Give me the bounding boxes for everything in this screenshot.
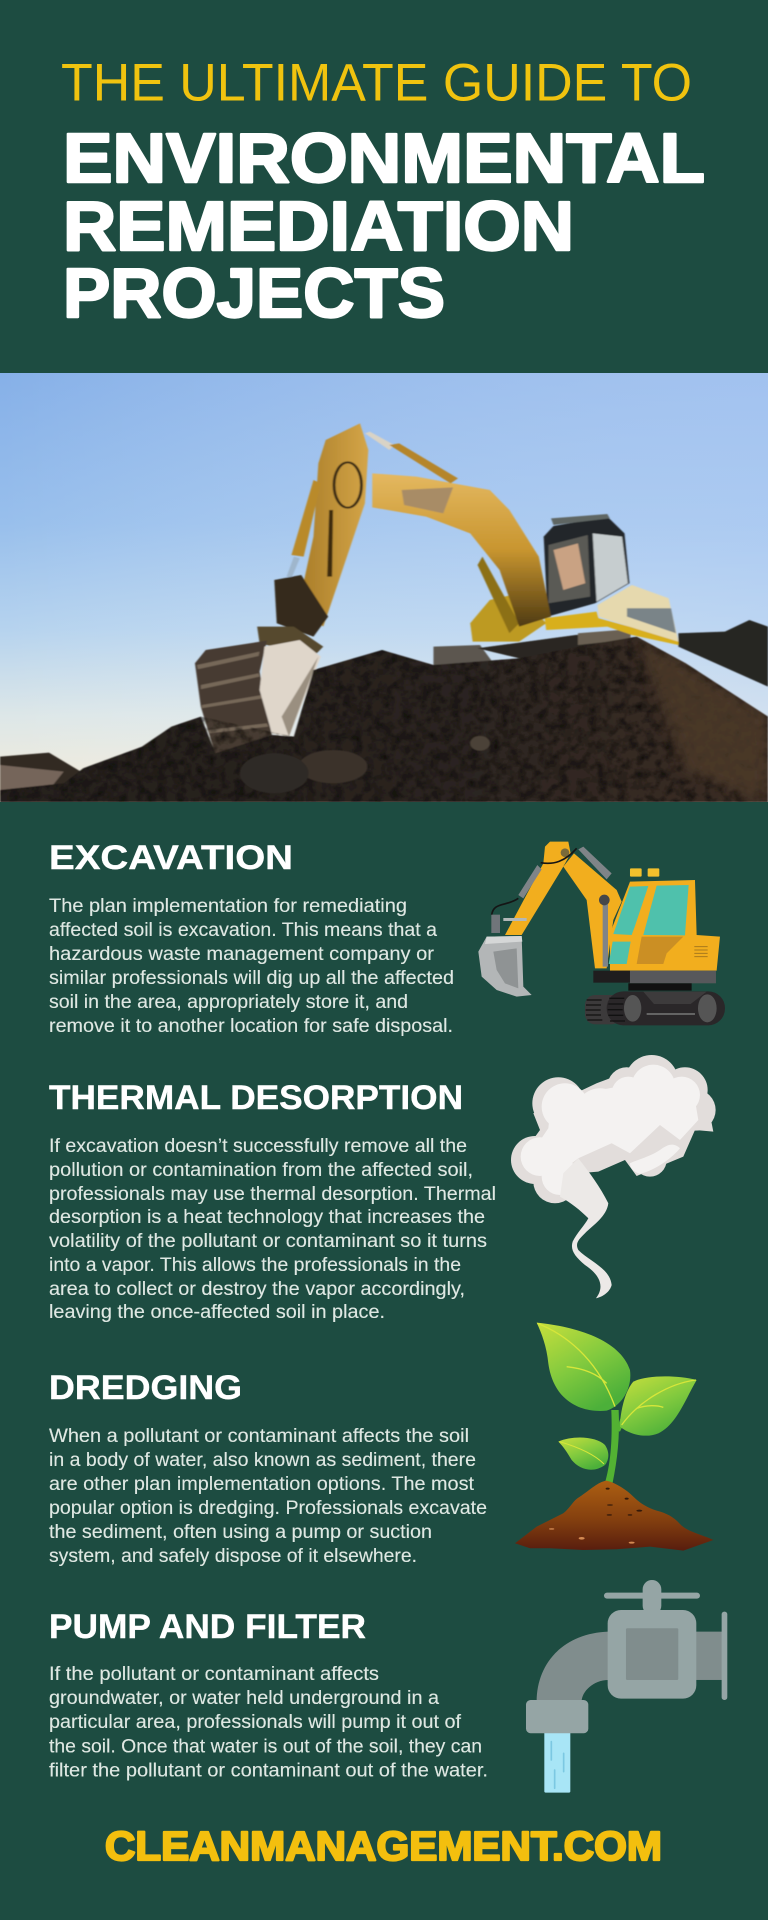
body: excavation: hazardous waste management company or bbox=[49, 944, 435, 965]
title line 2: REMEDIATION bbox=[63, 187, 574, 265]
body: dredging: are other plan implementation options. The most bbox=[49, 1474, 475, 1495]
body: excavation bbox=[49, 896, 454, 1037]
footer website: CLEANMANAGEMENT.COM bbox=[105, 1823, 662, 1869]
hero photo: excavator on soil mound bbox=[0, 373, 768, 803]
body: dredging: When a pollutant or contaminant affects the soil bbox=[49, 1426, 469, 1447]
icon: smoke cloud bbox=[511, 1055, 716, 1298]
heading: thermal desorption: THERMAL DESORPTION bbox=[49, 1079, 463, 1117]
body: thermal desorption: If excavation doesn’t successfully remove all the bbox=[49, 1136, 467, 1157]
section: dredging bbox=[49, 1323, 713, 1567]
body: excavation: remove it to another location for safe disposal. bbox=[49, 1016, 453, 1037]
body: thermal desorption bbox=[49, 1136, 496, 1323]
body: dredging bbox=[49, 1426, 487, 1567]
body: pump and filter: filter the pollutant or contaminant out of the water. bbox=[49, 1760, 488, 1782]
body: thermal desorption: volatility of the pollutant or contaminant so it turns bbox=[49, 1231, 487, 1252]
body: dredging: in a body of water, also known as sediment, there bbox=[49, 1450, 476, 1471]
body: thermal desorption: pollution or contamination from the affected soil, bbox=[49, 1160, 473, 1181]
body: pump and filter: groundwater, or water held underground in a bbox=[49, 1688, 439, 1709]
body: dredging: system, and safely dispose of it elsewhere. bbox=[49, 1546, 417, 1567]
body: thermal desorption: desorption is a heat technology that increases the bbox=[49, 1207, 485, 1228]
title bbox=[61, 54, 705, 332]
body: pump and filter: particular area, professionals will pump it out of bbox=[49, 1712, 462, 1733]
title kicker: THE ULTIMATE GUIDE TO bbox=[61, 54, 692, 112]
heading: pump and filter: PUMP AND FILTER bbox=[49, 1608, 366, 1646]
body: excavation: affected soil is excavation. This means that a bbox=[49, 920, 437, 941]
title line 3: PROJECTS bbox=[63, 254, 445, 332]
heading: dredging: DREDGING bbox=[49, 1369, 242, 1407]
body: pump and filter: If the pollutant or contaminant affects bbox=[49, 1664, 379, 1685]
body: thermal desorption: area to collect or destroy the vapor accordingly, bbox=[49, 1279, 465, 1300]
body: excavation: soil in the area, appropriately store it, and bbox=[49, 992, 408, 1013]
section: excavation bbox=[49, 839, 725, 1037]
icon: yellow excavator bbox=[478, 842, 725, 1025]
title line 1: ENVIRONMENTAL bbox=[63, 119, 705, 197]
body: thermal desorption: into a vapor. This allows the professionals in the bbox=[49, 1255, 461, 1276]
icon: seedling in soil bbox=[515, 1323, 713, 1551]
section: pump and filter bbox=[49, 1580, 727, 1793]
body: thermal desorption: leaving the once-affected soil in place. bbox=[49, 1302, 385, 1323]
icon: water faucet bbox=[526, 1580, 727, 1793]
section: thermal desorption bbox=[49, 1055, 716, 1323]
body: thermal desorption: professionals may use thermal desorption. Thermal bbox=[49, 1184, 496, 1205]
body: dredging: popular option is dredging. Professionals excavate bbox=[49, 1498, 487, 1519]
body: pump and filter bbox=[49, 1664, 488, 1782]
body: dredging: the sediment, often using a pump or suction bbox=[49, 1522, 432, 1543]
body: pump and filter: the soil. Once that water is out of the soil, they can bbox=[49, 1736, 482, 1758]
body: excavation: similar professionals will dig up all the affected bbox=[49, 968, 454, 989]
heading: excavation: EXCAVATION bbox=[49, 839, 293, 877]
body: excavation: The plan implementation for remediating bbox=[49, 896, 407, 917]
